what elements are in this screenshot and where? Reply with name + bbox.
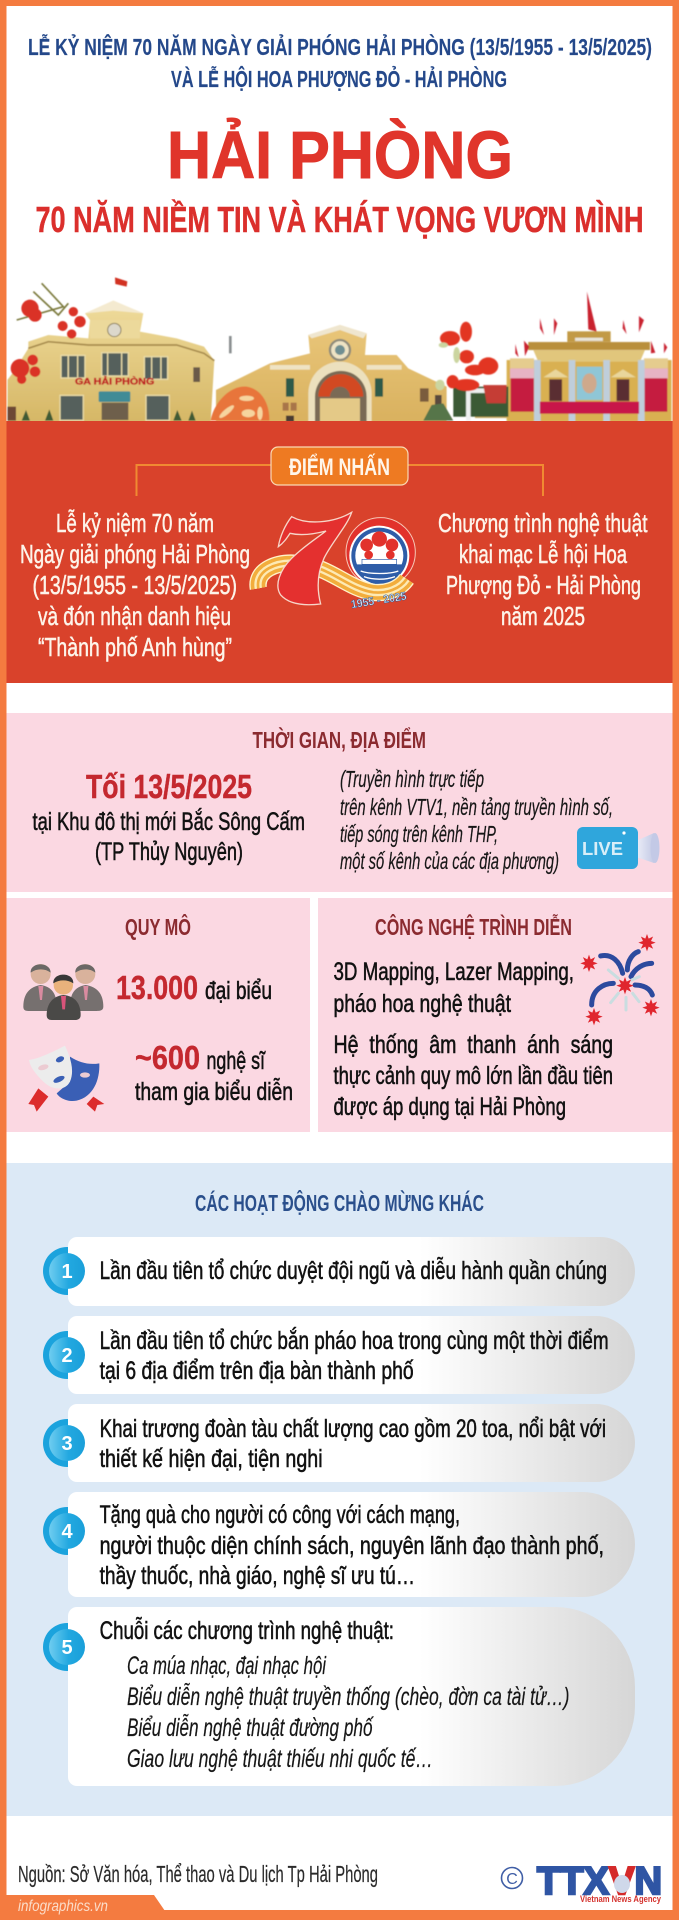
logo: TTXVN: TTXVN	[537, 1860, 662, 1903]
item 5: 5	[61, 1637, 73, 1659]
icon: 70 years emblem: 1955 - 2025	[350, 591, 407, 611]
stat: delegates: đại biểu	[205, 977, 272, 1005]
text block: anniversary: Ngày giải phóng Hải Phòng	[20, 539, 250, 569]
item 4	[43, 1492, 635, 1597]
logo: TTXVN: Vietnam News Agency	[580, 1894, 661, 1904]
panel: highlights	[6, 421, 672, 683]
text block: sound and light	[334, 1031, 613, 1121]
illustration: landmarks of Hai Phong with flame flowers	[7, 277, 672, 422]
item 4: 4	[61, 1521, 73, 1543]
heading: CÁC HOẠT ĐỘNG CHÀO MỪNG KHÁC	[195, 1189, 484, 1216]
date and venue: tại Khu đô thị mới Bắc Sông Cấm	[32, 807, 305, 836]
header heading	[28, 32, 652, 92]
stat: delegates	[116, 969, 272, 1006]
icon: fireworks	[580, 934, 660, 1025]
trees and white gate	[453, 385, 508, 421]
stat: artists	[135, 1039, 293, 1106]
item 5: Chuỗi các chương trình nghệ thuật:	[100, 1616, 394, 1645]
website tab: infographics.vn	[18, 1898, 108, 1915]
item 4: Tặng quà cho người có công với cách mạng,	[100, 1501, 460, 1529]
date and venue	[32, 768, 305, 866]
website tab	[6, 1895, 165, 1915]
heading: CÔNG NGHỆ TRÌNH DIỄN	[375, 912, 572, 940]
badge: highlight heading: ĐIỂM NHẤN	[289, 453, 390, 481]
title: HẢI PHÒNG	[167, 118, 513, 193]
item 5: Giao lưu nghệ thuật thiếu nhi quốc tế…	[127, 1745, 433, 1773]
item 5: Biểu diễn nghệ thuật đường phố	[127, 1713, 374, 1742]
building: left building	[7, 301, 214, 422]
text block: anniversary	[20, 508, 250, 662]
text block: art programme: năm 2025	[501, 601, 585, 631]
stat: artists: nghệ sĩ	[206, 1047, 266, 1075]
broadcast note: tiếp sóng trên kênh THP,	[340, 821, 498, 847]
stat: artists: tham gia biểu diễn	[135, 1077, 293, 1106]
bracket connector	[136, 465, 543, 496]
item 5	[43, 1607, 635, 1786]
text block: mapping	[334, 958, 574, 1018]
item 3: 3	[61, 1433, 73, 1455]
panel: other celebration activities	[6, 1163, 672, 1816]
item 3	[43, 1404, 635, 1482]
flags	[515, 292, 667, 357]
text block: mapping: 3D Mapping, Lazer Mapping,	[334, 958, 574, 986]
item 4: thầy thuốc, nhà giáo, nghệ sĩ ưu tú…	[100, 1562, 415, 1590]
date and venue: Tối 13/5/2025	[86, 768, 252, 805]
text block: anniversary: Lễ kỷ niệm 70 năm	[56, 508, 214, 538]
source line: Nguồn: Sở Văn hóa, Thể thao và Du lịch Tp Hải Phòng	[18, 1861, 378, 1887]
building: left building: GA HẢI PHÒNG	[75, 376, 154, 387]
icon: live megaphone: LIVE	[582, 839, 623, 859]
building: central market	[216, 325, 453, 422]
item 1: 1	[61, 1261, 73, 1283]
item 1	[43, 1237, 635, 1306]
badge: highlight heading	[271, 447, 408, 485]
panel: time and venue	[6, 713, 672, 892]
item 2: tại 6 địa điểm trên địa bàn thành phố	[100, 1357, 414, 1385]
item 2: 2	[61, 1345, 73, 1367]
panel: show technology	[318, 898, 672, 1132]
item 3: thiết kế hiện đại, tiện nghi	[100, 1445, 323, 1473]
item 2	[43, 1316, 635, 1394]
panel: scale	[6, 898, 310, 1132]
item 5: Ca múa nhạc, đại nhạc hội	[127, 1652, 327, 1680]
heading: QUY MÔ	[125, 913, 191, 940]
text block: anniversary: và đón nhận danh hiệu	[38, 601, 231, 631]
heading: THỜI GIAN, ĐỊA ĐIỂM	[252, 726, 426, 753]
icon: delegates	[23, 964, 103, 1020]
icon: theatre masks	[28, 1046, 104, 1112]
text block: sound and light: được áp dụng tại Hải Phòng	[334, 1093, 566, 1121]
icon: live megaphone	[577, 827, 660, 869]
flowers	[11, 277, 498, 421]
text block: anniversary: (13/5/1955 - 13/5/2025)	[32, 570, 237, 600]
broadcast note: một số kênh của các địa phương)	[340, 848, 559, 874]
text block: mapping: pháo hoa nghệ thuật	[334, 990, 511, 1018]
title	[36, 118, 644, 240]
icon: 70 years emblem	[258, 512, 415, 611]
text block: art programme	[438, 508, 648, 631]
date and venue: (TP Thủy Nguyên)	[95, 838, 243, 866]
broadcast note: (Truyền hình trực tiếp	[340, 766, 484, 792]
header heading: VÀ LỄ HỘI HOA PHƯỢNG ĐỎ - HẢI PHÒNG	[171, 64, 507, 92]
stat: delegates: 13.000	[116, 969, 198, 1006]
broadcast note	[340, 766, 613, 874]
stat: artists: ~600	[135, 1039, 200, 1076]
building: city theatre	[475, 292, 672, 422]
text block: anniversary: “Thành phố Anh hùng”	[38, 632, 232, 662]
logo: TTXVN: C	[506, 1871, 518, 1888]
